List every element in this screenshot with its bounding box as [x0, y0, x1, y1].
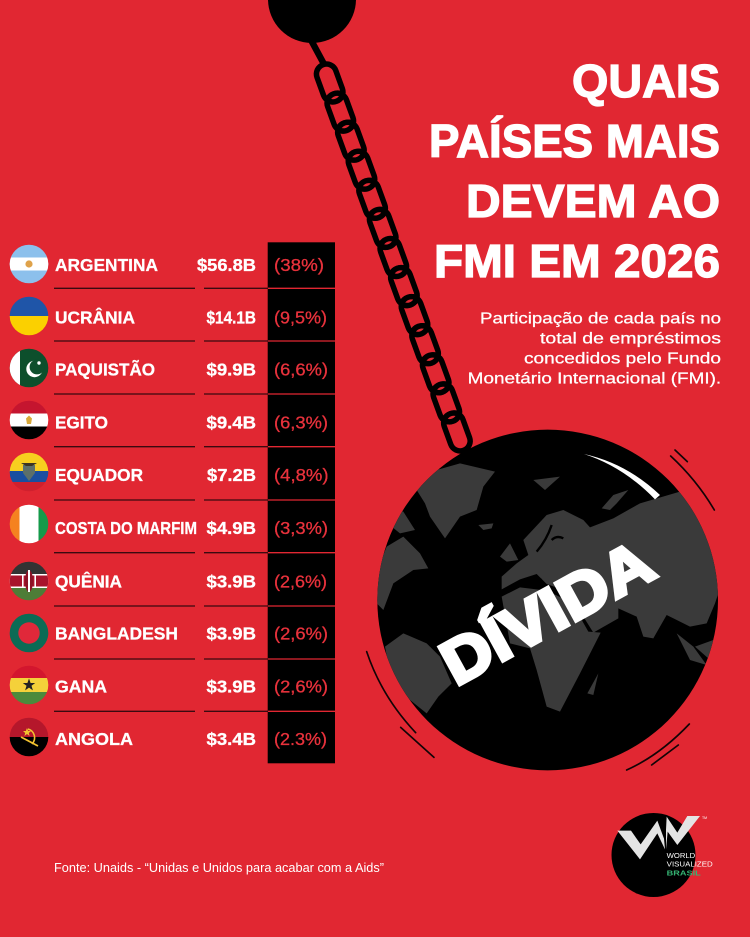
- icon: chain: [311, 40, 473, 454]
- row: Angola: (2.3%): [274, 729, 327, 749]
- row: Costa do Marfim: [9, 504, 328, 544]
- row: Egito: EGITO: [55, 412, 108, 432]
- row: Argentina: (38%): [274, 255, 324, 275]
- ball label: DÍVIDA: DÍVIDA: [430, 527, 665, 699]
- icon: wrecking ball with world map: [373, 430, 722, 770]
- logo: World Visualized Brasil: [612, 813, 713, 897]
- row: Egito: [9, 400, 328, 440]
- title: [429, 55, 720, 287]
- row: Costa do Marfim: $4.9B: [206, 518, 256, 538]
- row: Ucrânia: UCRÂNIA: [55, 306, 135, 327]
- row: Ucrânia: [9, 296, 327, 336]
- row: Equador: $7.2B: [207, 465, 256, 485]
- row: Paquistão: (6,6%): [274, 360, 328, 380]
- motion lines around ball: [367, 450, 714, 770]
- row: Equador: (4,8%): [274, 465, 328, 485]
- logo: World Visualized Brasil: BRASIL: [667, 868, 701, 877]
- row: Bangladesh: [9, 613, 328, 653]
- row: Quênia: (2,6%): [274, 571, 327, 591]
- subtitle: Monetário Internacional (FMI).: [468, 370, 721, 387]
- logo: World Visualized Brasil: WORLD: [667, 851, 695, 860]
- row: Quênia: $3.9B: [206, 571, 256, 591]
- map inland seas: [520, 525, 563, 582]
- subtitle: concedidos pelo Fundo: [524, 350, 721, 367]
- row: Argentina: $56.8B: [197, 255, 256, 275]
- row: Egito: $9.4B: [206, 412, 256, 432]
- row: Equador: EQUADOR: [55, 465, 143, 485]
- row: Paquistão: $9.9B: [206, 360, 256, 380]
- row: Bangladesh: $3.9B: [206, 623, 256, 643]
- row: Angola: $3.4B: [206, 729, 256, 749]
- row: Angola: ANGOLA: [55, 729, 133, 749]
- row: Gana: GANA: [55, 676, 107, 696]
- row: Costa do Marfim: (3,3%): [274, 518, 328, 538]
- row: Angola: [9, 717, 327, 757]
- row: Argentina: [9, 244, 324, 284]
- row: Paquistão: PAQUISTÃO: [55, 359, 155, 380]
- subtitle: [468, 310, 721, 387]
- row: Equador: [9, 452, 328, 492]
- logo: World Visualized Brasil: VISUALIZED: [667, 860, 713, 869]
- row: Gana: $3.9B: [206, 676, 256, 696]
- row: Egito: (6,3%): [274, 412, 328, 432]
- percentage column background: [268, 242, 335, 763]
- icon: top anchor ball: [268, 0, 356, 43]
- row: Ucrânia: (9,5%): [274, 307, 327, 327]
- row: Bangladesh: (2,6%): [274, 623, 328, 643]
- row: Paquistão: [9, 348, 328, 388]
- row: Quênia: QUÊNIA: [55, 570, 122, 591]
- icon: ball highlight: [584, 454, 660, 499]
- title: FMI EM 2026: [434, 235, 720, 287]
- source note: Fonte: Unaids - “Unidas e Unidos para acabar com a Aids”: [54, 860, 384, 875]
- row: Gana: (2,6%): [274, 676, 328, 696]
- subtitle: total de empréstimos: [540, 330, 721, 347]
- row: Argentina: ARGENTINA: [55, 255, 158, 275]
- row: Bangladesh: BANGLADESH: [55, 623, 178, 643]
- row: Ucrânia: $14.1B: [206, 307, 256, 327]
- row: Gana: [9, 665, 328, 705]
- subtitle: Participação de cada país no: [480, 310, 721, 327]
- title: DEVEM AO: [466, 175, 720, 227]
- title: PAÍSES MAIS: [429, 115, 720, 167]
- title: QUAIS: [572, 55, 720, 107]
- logo: World Visualized Brasil: TM: [702, 816, 707, 820]
- row: Quênia: [9, 561, 327, 601]
- row: Costa do Marfim: COSTA DO MARFIM: [55, 518, 197, 538]
- ranking table: [9, 242, 335, 763]
